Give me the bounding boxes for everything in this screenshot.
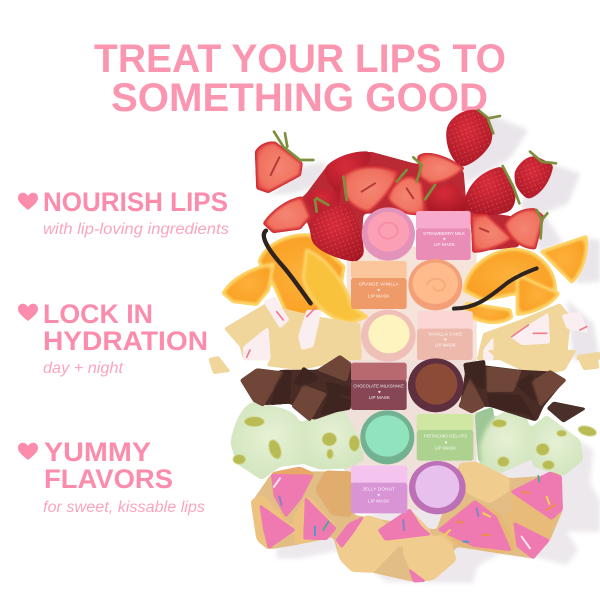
donut pink icing: [259, 472, 563, 582]
jar: strawberry milk lip mask: [416, 211, 471, 260]
benefit: lock in hydration: day + night: [43, 360, 124, 377]
jar: chocolate milkshake open: [408, 358, 463, 412]
cake pieces: [210, 303, 600, 360]
icon: heart: [18, 193, 38, 210]
donut backing: [253, 463, 563, 582]
strawberry seeds: [312, 111, 552, 260]
benefit: lock in hydration: LOCK IN: [43, 299, 153, 329]
jar: chocolate milkshake lip mask: ♥: [378, 389, 381, 394]
pistachio nuts: [233, 417, 598, 470]
cake icing with sprinkles: [243, 297, 588, 360]
jar: strawberry milk lip mask: STRAWBERRY MILK: [423, 231, 466, 236]
pistachio ice cream scoops: [231, 402, 583, 480]
icon: heart: [18, 443, 38, 460]
jar: orange vanilla lip mask: LIP MASK: [368, 293, 390, 298]
jar: orange vanilla open: [408, 259, 462, 310]
jar: pistachio gelato lip mask: LIP MASK: [435, 446, 457, 451]
product photo: lower half shadows and base: [277, 350, 600, 583]
strawberry leaves: [274, 110, 556, 238]
chocolate pieces: [240, 355, 587, 423]
jar: jelly donut open: [409, 461, 466, 514]
halved strawberries: [256, 142, 543, 252]
benefit: lock in hydration: [18, 299, 208, 377]
jar: chocolate milkshake lip mask: CHOCOLATE MILKSHAKE: [353, 383, 404, 388]
jar: pistachio gelato open: [360, 410, 414, 464]
title: TREAT YOUR LIPS TO: [94, 37, 506, 81]
whole strawberries: [307, 110, 553, 262]
jar: strawberry milk lip mask: LIP MASK: [434, 242, 456, 247]
jar: strawberry milk open: [362, 207, 415, 261]
jar: vanilla cake lip mask: LIP MASK: [435, 343, 457, 348]
cake pieces: [208, 350, 599, 377]
jar: orange vanilla lip mask: [351, 261, 407, 309]
jar: pistachio gelato lip mask: PISTACHIO GELATO: [424, 434, 467, 439]
donut sprinkles: [274, 476, 555, 548]
benefit: yummy flavors: for sweet, kissable lips: [43, 499, 205, 516]
jar: pistachio gelato lip mask: [417, 414, 473, 461]
jar: jelly donut lip mask: LIP MASK: [368, 498, 390, 503]
oranges: [223, 235, 586, 323]
title: SOMETHING GOOD: [111, 76, 488, 120]
centre base: [343, 350, 477, 510]
centre base: [347, 247, 477, 360]
jar: orange vanilla lip mask: ♥: [377, 287, 380, 292]
benefit: lock in hydration: HYDRATION: [43, 326, 208, 356]
benefit: yummy flavors: [18, 437, 205, 516]
jar: vanilla cake lip mask: ♥: [444, 337, 447, 342]
jar: vanilla cake lip mask: [417, 311, 473, 360]
strawberry backing: [267, 152, 520, 260]
jar: vanilla cake open: [361, 310, 416, 362]
jar: orange vanilla lip mask: ORANGE VANILLA: [359, 282, 400, 287]
jar: jelly donut lip mask: [351, 466, 407, 513]
product photo: upper half: [210, 110, 600, 362]
icon: heart: [18, 304, 38, 321]
drop shadows: [270, 113, 600, 360]
benefit: nourish lips: with lip-loving ingredients: [43, 221, 229, 238]
jar: pistachio gelato lip mask: ♥: [445, 440, 448, 445]
benefit: nourish lips: NOURISH LIPS: [43, 187, 228, 217]
jar: chocolate milkshake lip mask: LIP MASK: [369, 395, 391, 400]
donut cake pieces: [251, 462, 563, 582]
benefit: yummy flavors: YUMMY: [44, 437, 151, 467]
jar: vanilla cake lip mask: VANILLA CAKE: [428, 331, 462, 336]
product photo: lower half: [208, 350, 599, 582]
jar: chocolate milkshake lip mask: [351, 363, 407, 410]
jar: jelly donut lip mask: ♥: [377, 493, 380, 498]
vanilla beans: [264, 231, 537, 309]
drop shadows: [277, 437, 600, 583]
benefit: nourish lips: [18, 187, 229, 238]
jar: jelly donut lip mask: JELLY DONUT: [362, 487, 395, 492]
strawberry core marks: [271, 157, 488, 232]
jar: strawberry milk lip mask: ♥: [443, 237, 446, 242]
chocolate backing: [243, 357, 565, 422]
benefit: yummy flavors: FLAVORS: [44, 464, 173, 494]
title: [94, 37, 506, 120]
